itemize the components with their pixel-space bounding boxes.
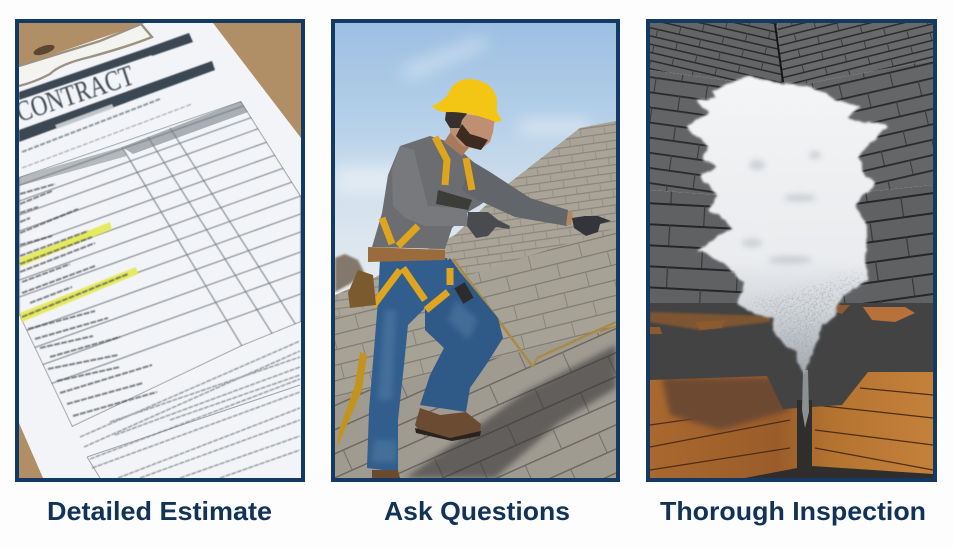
subheading bar text [55, 104, 114, 129]
far sleeve [462, 160, 568, 226]
roof valley line [775, 24, 783, 82]
dark valley strip [745, 400, 933, 478]
intro lines [22, 99, 192, 168]
exposed wood spots in band [650, 312, 770, 334]
frame: roofer photo [333, 21, 618, 480]
clouds [335, 38, 590, 195]
table rows and columns [19, 101, 301, 427]
intact left shingles [650, 23, 800, 315]
damaged shingle band [650, 303, 933, 409]
hanging lanyard [337, 352, 367, 448]
safety rope [453, 259, 616, 367]
lanyard clip [454, 282, 474, 304]
desk background [19, 23, 301, 478]
far hand [572, 216, 611, 236]
heading text: CONTRACT: CONTRACT [12, 61, 138, 129]
table row labels [20, 184, 157, 416]
panel: detailed estimate contract photo [0, 21, 320, 480]
harness straps [373, 137, 472, 310]
contract header bars [19, 33, 215, 142]
harness chest buckle [436, 190, 472, 210]
denim highlights [372, 300, 478, 462]
neck [444, 132, 469, 156]
man's shadow [405, 345, 616, 478]
contract paper [19, 23, 301, 478]
snow mass [688, 76, 888, 374]
intact right shingles [777, 23, 933, 315]
hard hat [432, 79, 502, 122]
snow texture shadows [742, 151, 821, 264]
fine print paragraphs [80, 341, 300, 478]
snow drip [802, 370, 809, 428]
near boot [372, 470, 400, 478]
near hand [467, 212, 510, 238]
frame: inspection photo [648, 21, 935, 480]
far boot [415, 408, 481, 440]
roofer figure [337, 79, 616, 478]
caption: Ask Questions: Ask Questions [384, 496, 570, 526]
wrist [566, 212, 573, 225]
sky [335, 23, 616, 293]
panel: roof damage inspection photo [648, 21, 935, 480]
tool pouch [348, 270, 376, 308]
table header bands [19, 147, 127, 186]
hair [445, 110, 470, 128]
table [19, 101, 301, 427]
caption: Thorough Inspection: Thorough Inspection [660, 496, 926, 526]
beard [456, 124, 488, 150]
highlighted lines [20, 222, 138, 322]
roof shingles [335, 120, 616, 480]
clipboard clip [19, 24, 152, 86]
far leg device [437, 316, 462, 342]
granular snow speckle [745, 272, 862, 370]
caption: Detailed Estimate: Detailed Estimate [47, 496, 272, 526]
shirt torso [372, 136, 484, 249]
tool belt [368, 247, 445, 262]
signature box outline [87, 385, 300, 478]
distant trees [335, 254, 364, 292]
frame: estimate photo [17, 21, 303, 480]
far leg [420, 258, 503, 412]
exposed wood decking [650, 370, 933, 478]
panel: roofer asking questions photo [333, 21, 618, 480]
near leg [367, 258, 456, 472]
face [450, 112, 495, 150]
near sleeve [392, 146, 468, 226]
